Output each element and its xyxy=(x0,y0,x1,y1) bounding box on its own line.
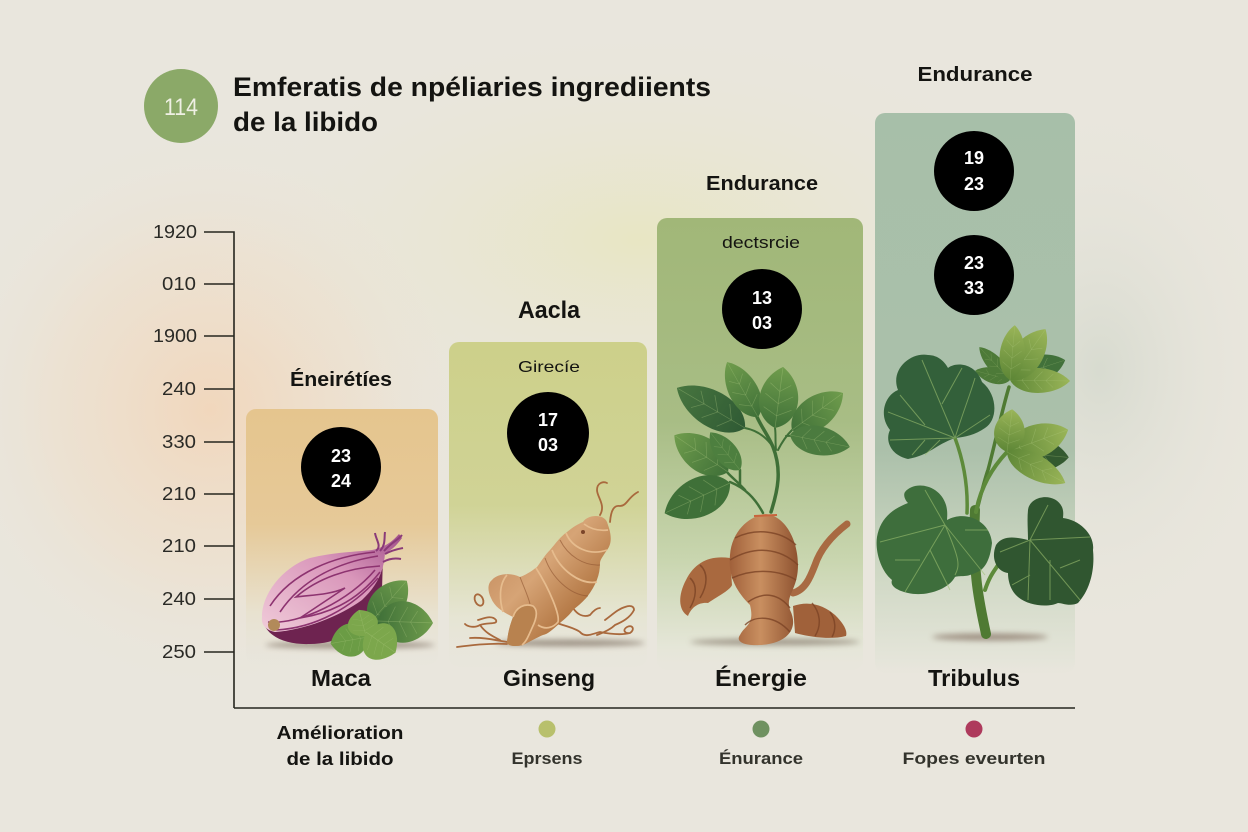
title badge xyxy=(144,69,218,143)
label: Tribulus: Tribulus xyxy=(928,665,1020,691)
value badge: top xyxy=(934,131,1014,211)
title badge: 114 xyxy=(164,94,198,121)
value badge: 24 xyxy=(331,471,351,491)
value badge: 23 xyxy=(331,446,351,466)
value badge xyxy=(301,427,381,507)
label: Énergie: Énergie xyxy=(715,664,807,691)
x axis xyxy=(234,707,1075,709)
y axis: 250 xyxy=(162,642,196,662)
legend: Fopes eveurten xyxy=(902,720,1046,768)
legend: Eprsens: Eprsens xyxy=(512,749,582,768)
y axis: 330 xyxy=(162,432,196,452)
y axis: 1920 xyxy=(153,222,197,242)
panel: Tribulus xyxy=(875,64,1093,691)
title: Emferatis de npéliaries ingrediients xyxy=(233,72,711,102)
value badge: 13 xyxy=(752,288,772,308)
icon: maca root xyxy=(262,532,435,669)
heading: Tribulus bar: Endurance xyxy=(918,64,1032,86)
heading: Ginseng bar: Aacla xyxy=(518,297,581,324)
value badge: bottom: 33 xyxy=(964,278,984,298)
y axis: 240 xyxy=(162,589,196,609)
title xyxy=(233,72,711,137)
legend: Amélioration de la libido xyxy=(276,723,404,769)
value badge: top: 19 xyxy=(964,148,984,168)
y axis: 210 xyxy=(162,536,196,556)
title: de la libido xyxy=(233,107,378,137)
icon: ginseng root xyxy=(457,482,645,647)
y axis: 240 xyxy=(162,379,196,399)
legend: Amélioration de la libido: Amélioration xyxy=(276,723,404,743)
value badge: top: 23 xyxy=(964,174,984,194)
legend: Énurance: Énurance xyxy=(719,749,803,768)
y axis xyxy=(153,222,234,708)
icon: tribulus plant xyxy=(877,320,1093,640)
panel: Maca xyxy=(246,368,438,691)
legend: Énurance xyxy=(719,720,803,768)
sub-heading: Ginseng bar: Girecíe xyxy=(518,359,580,376)
legend xyxy=(276,720,1046,769)
value badge: 17 xyxy=(538,410,558,430)
sub-heading: Énergie bar: dectsrcie xyxy=(722,233,800,252)
value badge: 03 xyxy=(752,313,772,333)
heading: Énergie bar: Endurance xyxy=(706,173,818,195)
legend: Eprsens xyxy=(512,720,582,768)
value badge: bottom: 23 xyxy=(964,253,984,273)
legend: Amélioration de la libido: de la libido xyxy=(286,749,394,769)
legend: Fopes eveurten: Fopes eveurten xyxy=(902,749,1046,768)
y axis: 1900 xyxy=(153,326,197,346)
y axis: 010 xyxy=(162,274,196,294)
label: Maca: Maca xyxy=(311,665,371,691)
icon: tuber plant xyxy=(656,355,860,646)
value badge: 03 xyxy=(538,435,558,455)
panel: Ginseng xyxy=(449,297,647,691)
value badge: bottom xyxy=(934,235,1014,315)
label: Ginseng: Ginseng xyxy=(503,665,595,691)
panel: Énergie xyxy=(656,173,863,691)
value badge xyxy=(722,269,802,349)
value badge xyxy=(507,392,589,474)
heading: Maca bar: Éneirétíes xyxy=(290,368,392,391)
y axis: 210 xyxy=(162,484,196,504)
